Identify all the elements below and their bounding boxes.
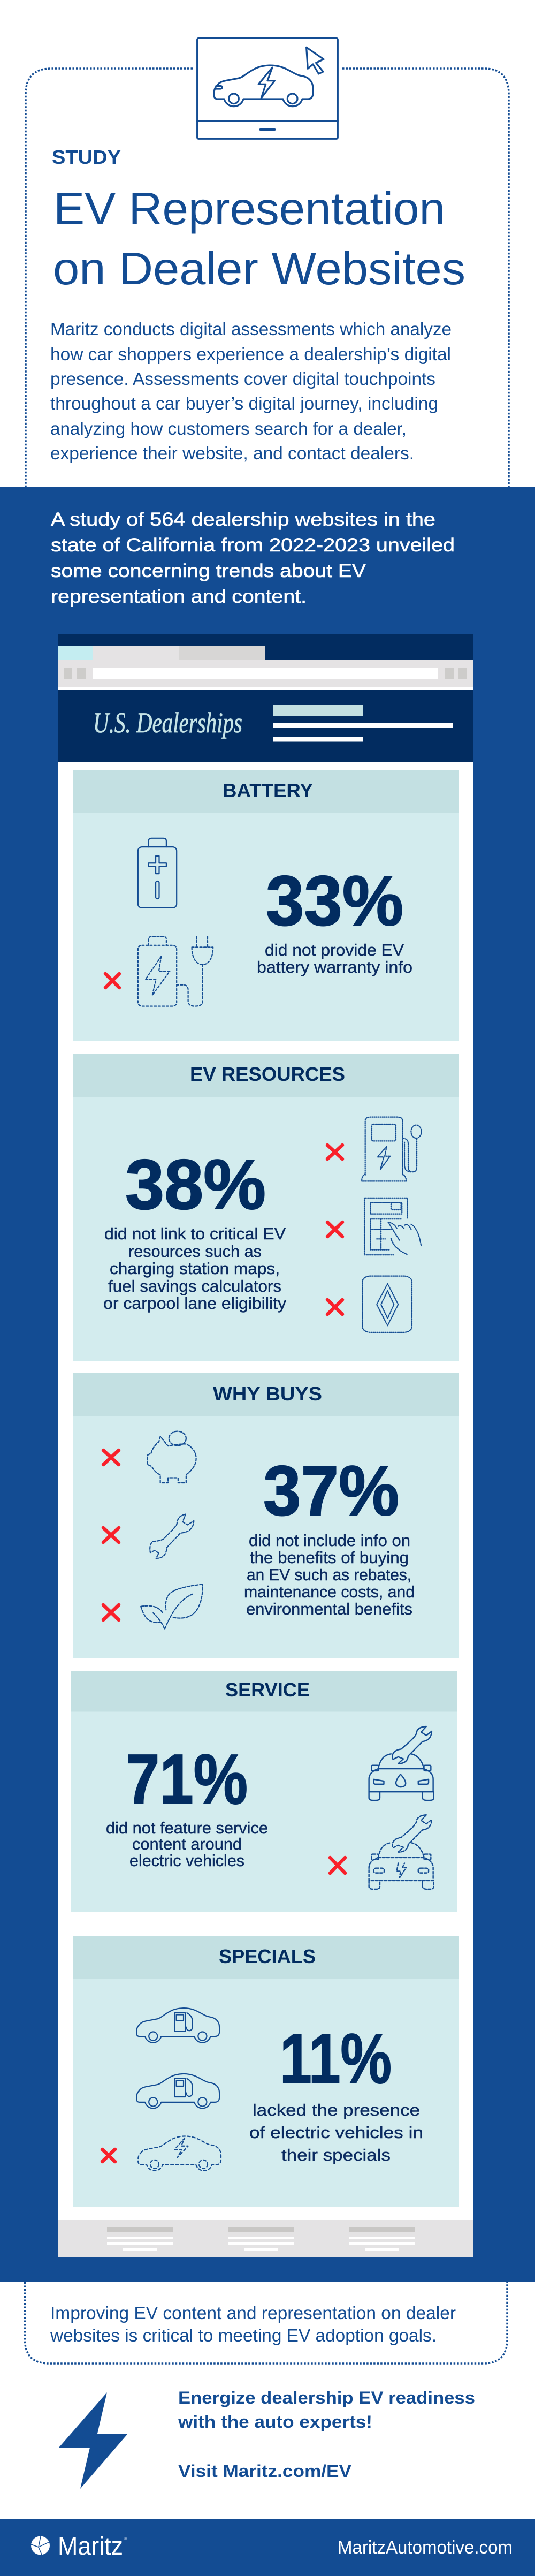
title: on Dealer Websites — [53, 244, 465, 294]
text: specials finding: of electric vehicles in — [249, 2123, 423, 2142]
icon: red x — [103, 1450, 119, 1465]
text: EV resources finding: fuel savings calculators — [108, 1277, 281, 1295]
icon: car service with wrench and oil drop — [369, 1726, 434, 1800]
icon: red x — [102, 2149, 115, 2162]
text block: study summary: state of California from 2022-2023 unveiled — [51, 535, 455, 556]
label: study: STUDY — [52, 146, 121, 168]
text block: about the assessments — [50, 319, 452, 463]
icon: red x — [327, 1145, 342, 1159]
title: EV Representation — [54, 184, 445, 234]
icon: missing charging station — [362, 1117, 422, 1181]
text: EV resources finding — [103, 1224, 287, 1313]
icon: missing piggy bank — [148, 1431, 196, 1483]
icon: lightning bolt — [59, 2392, 128, 2489]
text block: about the assessments: experience their website, and contact dealers. — [50, 443, 414, 463]
icon: gas car — [136, 2008, 219, 2043]
text: service finding — [106, 1819, 268, 1870]
site header: U.S. Dealerships — [58, 690, 473, 762]
title — [53, 184, 465, 294]
text block: study summary: A study of 564 dealership websites in the — [51, 509, 435, 530]
text: why buys finding: an EV such as rebates, — [247, 1565, 411, 1584]
stat: 38%: 38% — [125, 1145, 266, 1224]
text: EV resources finding: charging station maps, — [110, 1259, 280, 1278]
text block: about the assessments: how car shoppers experience a dealership’s digital — [50, 344, 451, 364]
heading band: battery — [73, 770, 459, 813]
text: service finding: did not feature service — [106, 1819, 268, 1837]
text: service finding: electric vehicles — [129, 1851, 244, 1870]
stat: 33%: 33% — [266, 861, 403, 940]
heading band: EV resources — [73, 1054, 459, 1097]
text block: about the assessments: throughout a car buyer’s digital journey, including — [50, 393, 438, 413]
text: specials finding — [249, 2101, 423, 2164]
icon: red x — [330, 1858, 345, 1873]
text: why buys finding: maintenance costs, and — [244, 1582, 415, 1601]
text: EV resources finding: did not link to critical EV — [104, 1224, 286, 1243]
panel: conclusion dotted frame — [25, 2282, 507, 2363]
text block: about the assessments: presence. Assessments cover digital touchpoints — [50, 369, 435, 389]
text: EV resources finding: resources such as — [128, 1242, 262, 1261]
heading band: specials — [73, 1936, 459, 1979]
text block: conclusion: Improving EV content and representation on dealer — [50, 2303, 456, 2323]
call to action — [178, 2388, 475, 2481]
panel: specials — [73, 1936, 459, 2207]
panel: service — [71, 1671, 457, 1912]
text: battery finding: battery warranty info — [257, 958, 412, 976]
icon: missing electric car — [138, 2136, 221, 2171]
text block: about the assessments: analyzing how customers search for a dealer, — [50, 419, 407, 438]
text: battery finding: did not provide EV — [265, 941, 404, 959]
icon: battery — [138, 838, 177, 908]
text: service finding: content around — [132, 1835, 242, 1853]
website url: MaritzAutomotive.com — [338, 2537, 513, 2558]
call to action: Visit Maritz.com/EV — [178, 2461, 352, 2481]
icon: red x — [103, 1605, 119, 1620]
browser page footer — [58, 2220, 473, 2257]
site header: U.S. Dealerships: U.S. Dealerships — [93, 707, 242, 739]
logo: Maritz: ® — [124, 2536, 127, 2541]
icon: missing fuel savings calculator — [364, 1198, 421, 1255]
icon: red x — [327, 1222, 342, 1237]
browser tab bar — [58, 634, 473, 660]
logo: Maritz: Maritz — [58, 2532, 123, 2560]
text: EV resources finding: or carpool lane eligibility — [103, 1294, 287, 1313]
text: specials finding: their specials — [281, 2146, 391, 2164]
panel: browser window — [58, 634, 473, 2257]
text: why buys finding: environmental benefits — [246, 1600, 412, 1618]
panel: why buys — [73, 1373, 459, 1658]
heading band: specials: SPECIALS — [219, 1945, 316, 1967]
text block: conclusion: websites is critical to meeting EV adoption goals. — [50, 2325, 437, 2345]
stat: 37%: 37% — [263, 1451, 399, 1530]
heading band: EV resources: EV RESOURCES — [190, 1063, 345, 1085]
text: specials finding: lacked the presence — [253, 2101, 420, 2119]
icon: gas car — [136, 2074, 219, 2108]
text block: about the assessments: Maritz conducts digital assessments which analyze — [50, 319, 452, 339]
text block: study summary — [51, 509, 455, 607]
icon: red x — [327, 1300, 342, 1314]
footer band — [0, 2519, 535, 2576]
heading band: why buys — [73, 1373, 459, 1416]
icon: missing leaf — [141, 1584, 203, 1630]
heading band: service: SERVICE — [225, 1679, 310, 1701]
stat: 71%: 71% — [126, 1740, 248, 1819]
heading band: service — [71, 1671, 457, 1712]
text: battery finding — [257, 941, 412, 976]
text block: conclusion — [50, 2303, 456, 2345]
browser address bar — [58, 660, 473, 687]
call to action: Energize dealership EV readiness — [178, 2388, 475, 2407]
text: why buys finding: the benefits of buying — [250, 1548, 409, 1567]
panel: study introduction dotted frame — [26, 69, 509, 487]
icon: monitor with electric car and cursor — [197, 38, 338, 139]
call to action: with the auto experts! — [178, 2412, 372, 2431]
icon: missing wrench — [150, 1514, 194, 1558]
heading band: battery: BATTERY — [223, 779, 313, 801]
icon: missing EV battery charger — [138, 936, 213, 1006]
heading band: why buys: WHY BUYS — [213, 1383, 322, 1405]
text: why buys finding — [244, 1531, 415, 1618]
panel: blue study band — [0, 487, 535, 2282]
panel: EV resources — [73, 1054, 459, 1361]
stat: 11%: 11% — [280, 2019, 392, 2098]
text block: study summary: representation and content. — [51, 586, 307, 607]
text block: study summary: some concerning trends about EV — [51, 560, 366, 581]
icon: red x — [105, 974, 119, 988]
panel: battery — [73, 770, 459, 1041]
icon: missing carpool lane diamond — [362, 1276, 412, 1332]
text: why buys finding: did not include info on — [249, 1531, 410, 1550]
icon: missing electric car service — [369, 1815, 434, 1889]
icon: red x — [103, 1528, 119, 1542]
